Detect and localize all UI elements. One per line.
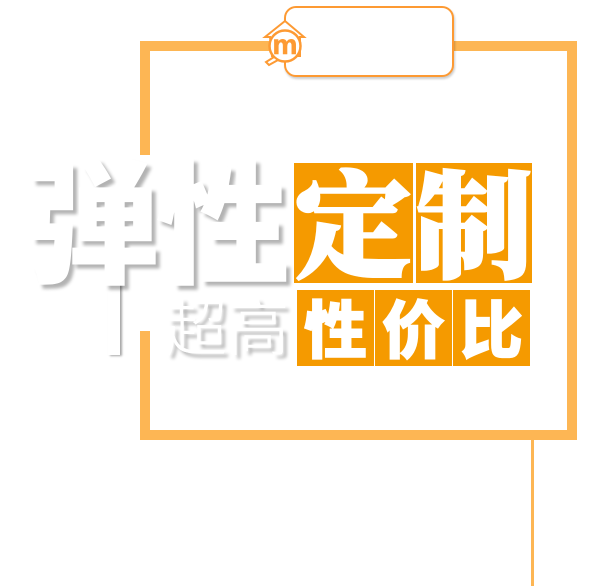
orange frame [140,41,577,440]
icon: house magnifier logo: m [273,29,297,60]
panel: 性: 性 [304,281,367,372]
icon: house magnifier logo [262,20,307,66]
panel: 制: 制 [416,135,532,302]
frame gap behind headline [135,155,155,331]
headline: 弹性: 弹性 [25,118,287,312]
panel: 比: 比 [460,281,523,372]
panel: 价: 价 [382,281,445,372]
vertical connector line [531,439,534,586]
panel: 定: 定 [296,135,412,302]
stem of headline glyph [108,275,120,355]
subheadline: 超高: 超高 [165,278,289,368]
label box [284,6,454,77]
